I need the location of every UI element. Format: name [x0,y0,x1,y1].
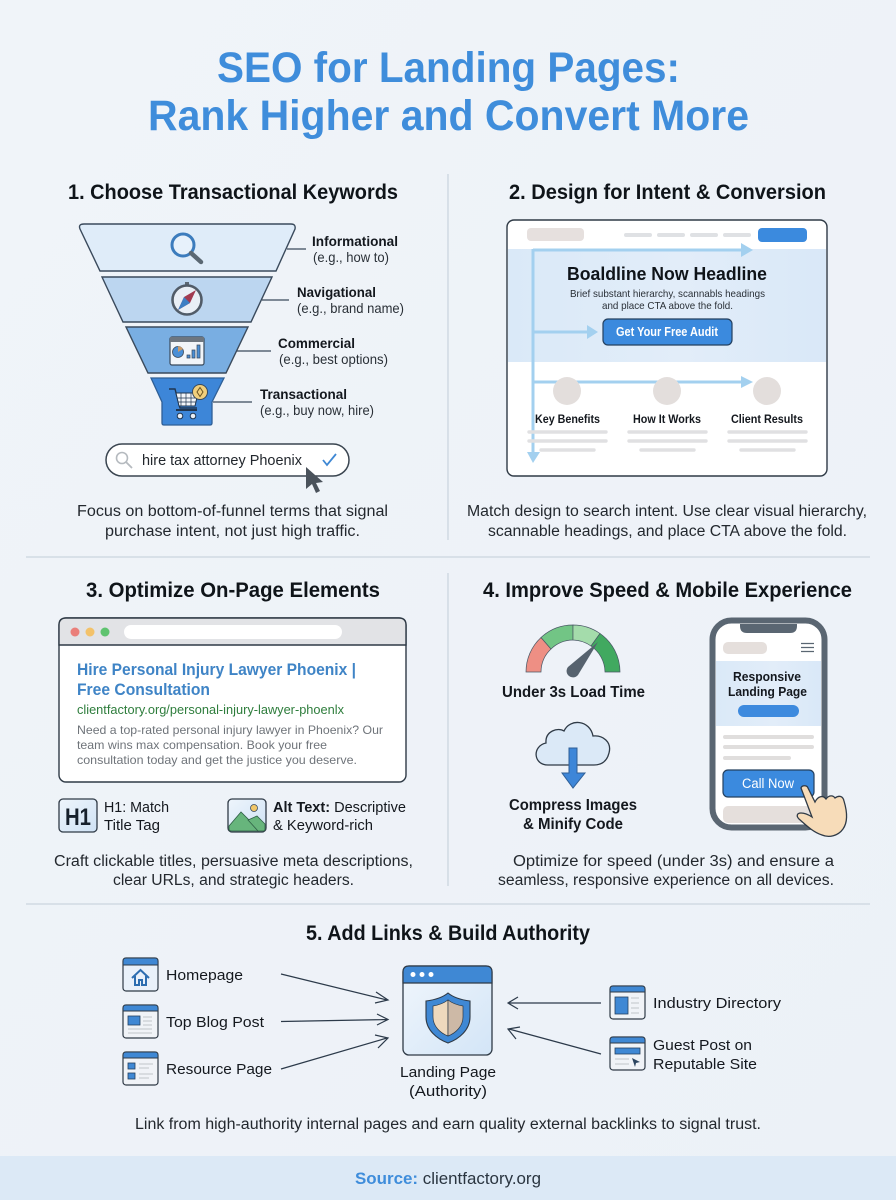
funnel tier: informational: Informational [312,233,398,249]
icon: H1 tag [59,799,97,832]
landing page wireframe: Boaldline Now Headline [567,263,767,284]
funnel tier: transactional: Transactional [260,386,347,402]
source: guest post: Guest Post on [653,1037,752,1054]
alt text note: & Keyword-rich [273,817,373,834]
landing page label: Landing Page [400,1064,496,1081]
funnel diagram [80,224,404,425]
heading: section 4: 4. Improve Speed & Mobile Experience [483,579,852,602]
browser search result: Hire Personal Injury Lawyer Phoenix | [77,661,356,679]
source: resource page: Resource Page [166,1061,272,1078]
icon: image alt text [228,799,266,832]
landing page authority icon [403,966,492,1055]
call to action button [603,319,732,345]
description [467,503,867,540]
source: resource page [123,1052,272,1085]
landing page label [400,1064,496,1100]
mobile phone: Landing Page [728,685,807,699]
call now button [723,770,814,797]
call now button: Call Now [742,776,794,791]
landing page wireframe: Client Results [731,412,803,426]
compress label [509,797,637,833]
description: purchase intent, not just high traffic. [105,523,360,540]
heading: section 1: 1. Choose Transactional Keywords [68,181,398,204]
gauge label: Under 3s Load Time [502,684,645,701]
heading: section 3: 3. Optimize On-Page Elements [86,579,380,602]
browser search result: clientfactory.org/personal-injury-lawyer-phoenlx [77,703,345,717]
landing page wireframe [507,220,827,476]
funnel tier: navigational: Navigational [297,284,376,300]
description [77,503,388,540]
source: guest post: Reputable Site [653,1056,757,1073]
source: guest post [610,1037,757,1073]
landing page wireframe: and place CTA above the fold. [602,300,733,312]
arrows: internal links [281,974,388,1069]
browser search result: Need a top-rated personal injury lawyer in Phoenix? Our [77,723,383,737]
funnel tier: navigational: (e.g., brand name) [297,300,404,316]
footer source band [0,1156,896,1200]
description: scannable headings, and place CTA above the fold. [488,523,847,540]
icon: H1 tag: H1 [65,804,91,831]
alt text note: Alt Text: Descriptive [273,799,406,816]
panel: 3 optimize on-page elements [54,579,413,889]
arrows: external links [508,997,601,1054]
search bar: hire tax attorney Phoenix [142,453,303,469]
description [498,853,834,889]
source: homepage [123,958,243,991]
compress label: & Minify Code [523,816,623,833]
H1 note [104,799,169,834]
panel: 5 add links and build authority [123,922,782,1133]
source: industry directory: Industry Directory [653,995,782,1012]
funnel tier: navigational [102,277,404,322]
browser search result: team wins max compensation. Book your free [77,738,327,752]
funnel tier: informational [80,224,398,271]
description: Focus on bottom-of-funnel terms that signal [77,503,388,520]
H1 note: H1: Match [104,799,169,816]
title [148,44,749,140]
source: homepage: Homepage [166,967,243,984]
icon: tapping hand [797,786,846,836]
heading: section 5: 5. Add Links & Build Authority [306,922,590,945]
mobile phone: Responsive [733,670,801,684]
search bar [106,444,349,493]
source: top blog post: Top Blog Post [166,1014,265,1031]
call to action button: Get Your Free Audit [616,325,719,339]
icon: cloud compress [536,722,610,788]
icon: shield [426,993,470,1043]
funnel tier: commercial: (e.g., best options) [279,351,388,367]
funnel tier: commercial [126,327,388,373]
description [54,853,413,889]
title: SEO for Landing Pages: [217,44,680,92]
landing page wireframe: Brief substant hierarchy, scannabls headings [570,288,765,300]
description: Craft clickable titles, persuasive meta descriptions, [54,853,413,870]
alt text note [273,799,406,834]
source: top blog post [123,1005,265,1038]
title: Rank Higher and Convert More [148,92,749,140]
speed gauge [526,625,620,677]
panel: 2 design for intent and conversion [467,181,867,540]
description: Link from high-authority internal pages and earn quality external backlinks to signal trust. [135,1116,761,1133]
browser search result: Free Consultation [77,681,210,699]
funnel tier: informational: (e.g., how to) [313,249,389,265]
description: clear URLs, and strategic headers. [113,872,354,889]
landing page wireframe: Key Benefits [535,412,600,426]
H1 note: Title Tag [104,817,160,834]
funnel tier: transactional [151,378,374,425]
panel: 4 improve speed and mobile experience [483,579,852,889]
funnel tier: commercial: Commercial [278,335,355,351]
landing page label: (Authority) [409,1083,487,1100]
heading: section 2: 2. Design for Intent & Conversion [509,181,826,204]
panel: 1 choose transactional keywords [68,181,404,540]
source: industry directory [610,986,782,1019]
landing page wireframe: How It Works [633,412,701,426]
description: seamless, responsive experience on all devices. [498,872,834,889]
browser search result [59,618,406,782]
scan path arrows [527,243,753,463]
description: Optimize for speed (under 3s) and ensure a [513,853,834,870]
compress label: Compress Images [509,797,637,814]
footer source band: Source: clientfactory.org [355,1170,541,1188]
funnel tier: transactional: (e.g., buy now, hire) [260,402,374,418]
browser search result: consultation today and get the justice you deserve. [77,753,357,767]
description: Match design to search intent. Use clear visual hierarchy, [467,503,867,520]
mobile phone [712,620,824,828]
